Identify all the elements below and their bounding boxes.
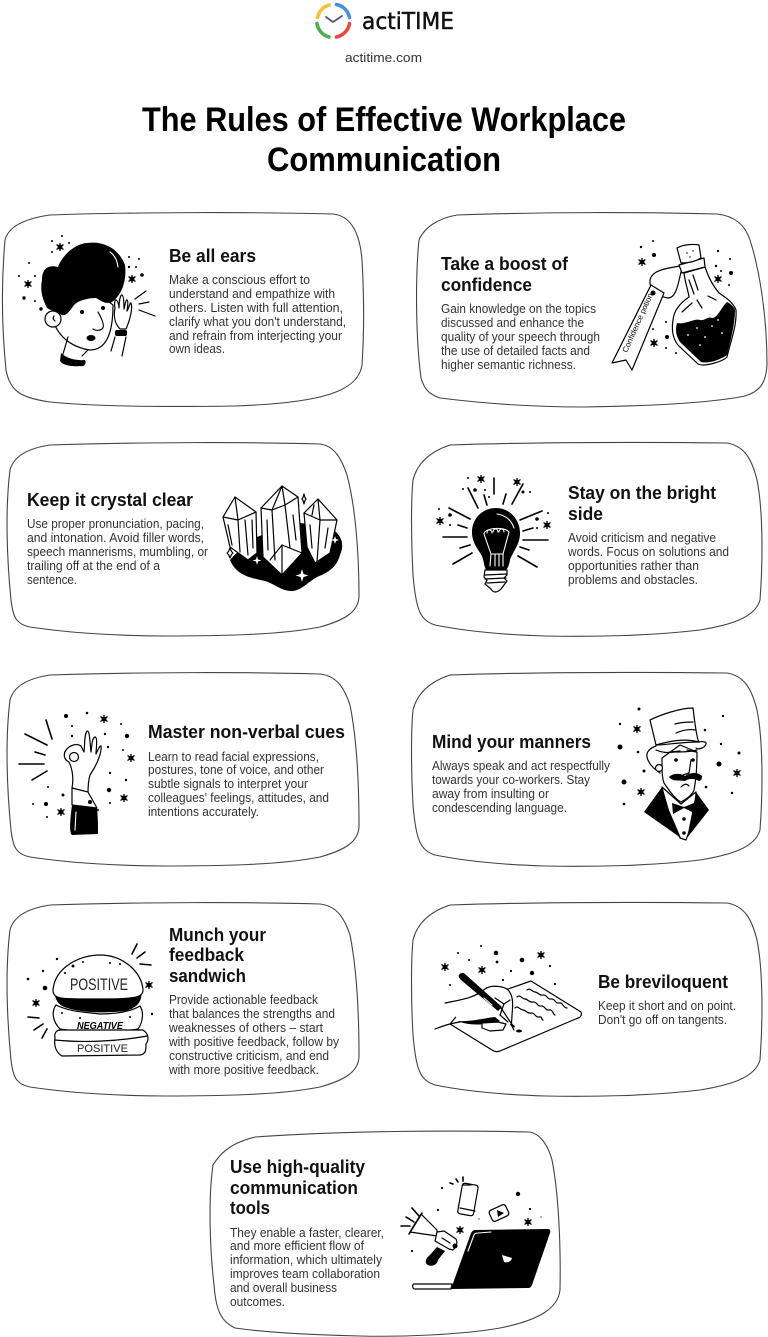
body text: the use of detailed facts and [441,343,590,358]
card outline [7,673,359,866]
heading: communication [230,1178,358,1198]
body text: Gain knowledge on the topics [441,301,596,316]
body text [168,992,339,1077]
body text: colleagues' feelings, attitudes, and [148,790,329,805]
title [142,101,626,179]
body text: words. Focus on solutions and [567,544,729,559]
body text: quality of your speech through [441,329,600,344]
body text: Always speak and act respectfully [432,758,610,773]
card outline [417,213,767,407]
body text: and overall business [230,1280,337,1295]
heading: feedback [169,945,245,965]
body text: others. Listen with full attention, [169,300,343,315]
heading [230,1157,365,1218]
body text: outcomes. [230,1294,285,1309]
body text: Provide actionable feedback [169,992,318,1007]
icon: confidence potion [612,240,736,370]
body text: constructive criticism, and end [169,1048,329,1063]
body text [148,749,329,819]
heading: sandwich [169,966,246,986]
card outline [412,672,762,866]
icon: light bulb [436,475,550,592]
panel: be all ears [2,213,363,407]
body text: and more efficient flow of [230,1238,364,1253]
body text: and intonation. Avoid filler words, [27,530,204,545]
body text [598,998,736,1027]
heading: Master non-verbal cues [148,722,345,742]
body text: clarify what you don't understand, [169,314,346,329]
body text: Avoid criticism and negative [568,530,716,545]
heading: confidence [441,275,532,295]
panel: keep it crystal clear [7,443,359,636]
logo: actiTIME [317,4,454,37]
icon: confidence potion: Confidence potion [621,292,655,354]
body text [441,301,600,372]
body text: sentence. [27,572,77,587]
icon: feedback sandwich: POSITIVE [70,975,128,994]
body text [27,516,209,587]
panel: use high-quality communication tools [210,1131,560,1336]
panel: stay on the bright side [412,442,762,636]
panel: be breviloquent [412,902,762,1096]
heading: tools [230,1198,270,1218]
body text [230,1225,384,1309]
card outline [210,1131,560,1336]
body text: information, which ultimately [230,1252,382,1267]
body text: speech mannerisms, mumbling, or [27,544,209,559]
website: actitime.com [345,50,422,65]
body text: They enable a faster, clearer, [230,1225,384,1240]
card outline [412,902,762,1096]
heading [568,483,716,524]
body text: postures, tone of voice, and other [148,762,325,777]
body text: towards your co-workers. Stay [432,772,590,787]
body text: trailing off at the end of a [27,558,161,573]
body text [169,272,346,356]
heading: Munch your [169,925,266,945]
panel: munch your feedback sandwich [7,903,359,1096]
body text: weaknesses of others – start [168,1020,323,1035]
body text: away from insulting or [432,786,550,801]
body text: and refrain from interjecting your [169,328,343,343]
icon: feedback sandwich: NEGATIVE [77,1020,124,1032]
card outline [412,442,762,636]
card outline [2,213,363,407]
body text: with positive feedback, follow by [168,1034,339,1049]
body text: opportunities rather than [568,558,699,573]
body text: Use proper pronunciation, pacing, [27,516,204,531]
icon: gentleman in top hat [618,708,740,840]
wordmark: actiTIME [362,9,454,35]
title: The Rules of Effective Workplace [142,101,626,139]
body text: Don't go off on tangents. [598,1012,727,1027]
heading [169,925,266,986]
body text: improves team collaboration [230,1266,380,1281]
body text: problems and obstacles. [568,572,698,587]
panel: take a boost of confidence [417,213,767,407]
panel: mind your manners [412,672,762,866]
body text: condescending language. [432,800,567,815]
body text: higher semantic richness. [441,357,576,372]
card outline [7,443,359,636]
icon: feedback sandwich [27,944,153,1056]
heading: Be breviloquent [598,972,728,992]
body text: Make a conscious effort to [169,272,310,287]
heading: side [568,504,603,524]
body text: that balances the strengths and [169,1006,335,1021]
icon: hand writing with pen [435,945,581,1052]
body text: understand and empathize with [169,286,335,301]
heading: Mind your manners [432,732,591,752]
icon: crystals [223,486,342,591]
body text: Learn to read facial expressions, [148,749,319,764]
body text [432,758,610,815]
heading: Use high-quality [230,1157,365,1177]
body text: discussed and enhance the [441,315,584,330]
icon: feedback sandwich: POSITIVE [77,1043,128,1055]
body text: intentions accurately. [148,804,259,819]
icon: person listening [18,235,155,366]
body text [567,530,729,587]
heading: Keep it crystal clear [27,490,193,510]
heading: Take a boost of [441,254,569,274]
icon: clock ring [317,4,350,37]
body text: own ideas. [169,341,225,356]
heading [441,254,569,295]
panel: master non-verbal cues [7,673,359,866]
body text: subtle signals to interpret your [148,776,309,791]
title: Communication [267,141,501,179]
body text: with more positive feedback. [168,1062,319,1077]
heading: Be all ears [169,246,256,266]
card outline [7,903,359,1096]
icon: OK hand gesture [19,712,134,835]
icon: laptop, megaphone and phone [401,1177,550,1289]
heading: Stay on the bright [568,483,716,503]
body text: Keep it short and on point. [598,998,736,1013]
